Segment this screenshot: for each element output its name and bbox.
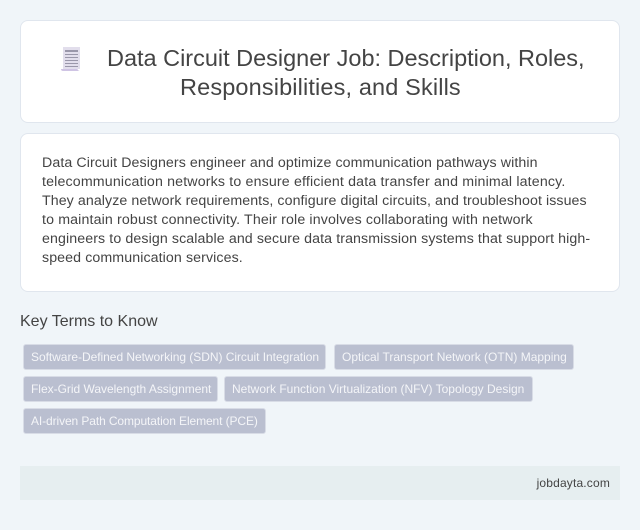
description text: Data Circuit Designers engineer and optimize communication pathways within bbox=[42, 155, 538, 171]
icon: document scroll bbox=[61, 47, 80, 71]
tag bbox=[23, 376, 218, 402]
description text: telecommunication networks to ensure efficient data transfer and minimal latency. bbox=[42, 174, 565, 190]
tag bbox=[23, 408, 266, 434]
description text: to maintain robust connectivity. Their role involves collaborating with network bbox=[42, 212, 533, 228]
footer bar bbox=[20, 466, 620, 500]
tag: Software-Defined Networking (SDN) Circuit Integration bbox=[31, 350, 319, 364]
footer source: jobdayta.com bbox=[537, 476, 610, 490]
description text bbox=[42, 155, 590, 266]
title: Data Circuit Designer Job: Description, Roles, bbox=[107, 45, 585, 71]
tag bbox=[224, 376, 533, 402]
description text: speed communication services. bbox=[42, 250, 243, 266]
title bbox=[107, 45, 585, 100]
tag bbox=[334, 344, 574, 370]
tag: Optical Transport Network (OTN) Mapping bbox=[342, 350, 567, 364]
description text: engineers to design scalable and secure data transmission systems that support high- bbox=[42, 231, 590, 247]
title: Responsibilities, and Skills bbox=[180, 74, 461, 100]
header card bbox=[20, 20, 620, 123]
tag: Flex-Grid Wavelength Assignment bbox=[31, 382, 211, 396]
description card bbox=[20, 133, 620, 292]
tag list bbox=[23, 344, 574, 434]
tag bbox=[23, 344, 326, 370]
description text: They analyze network requirements, configure digital circuits, and troubleshoot issues bbox=[42, 193, 587, 209]
tag: Network Function Virtualization (NFV) Topology Design bbox=[232, 382, 524, 396]
tag: AI-driven Path Computation Element (PCE) bbox=[31, 414, 258, 428]
heading: key terms: Key Terms to Know bbox=[20, 313, 158, 330]
